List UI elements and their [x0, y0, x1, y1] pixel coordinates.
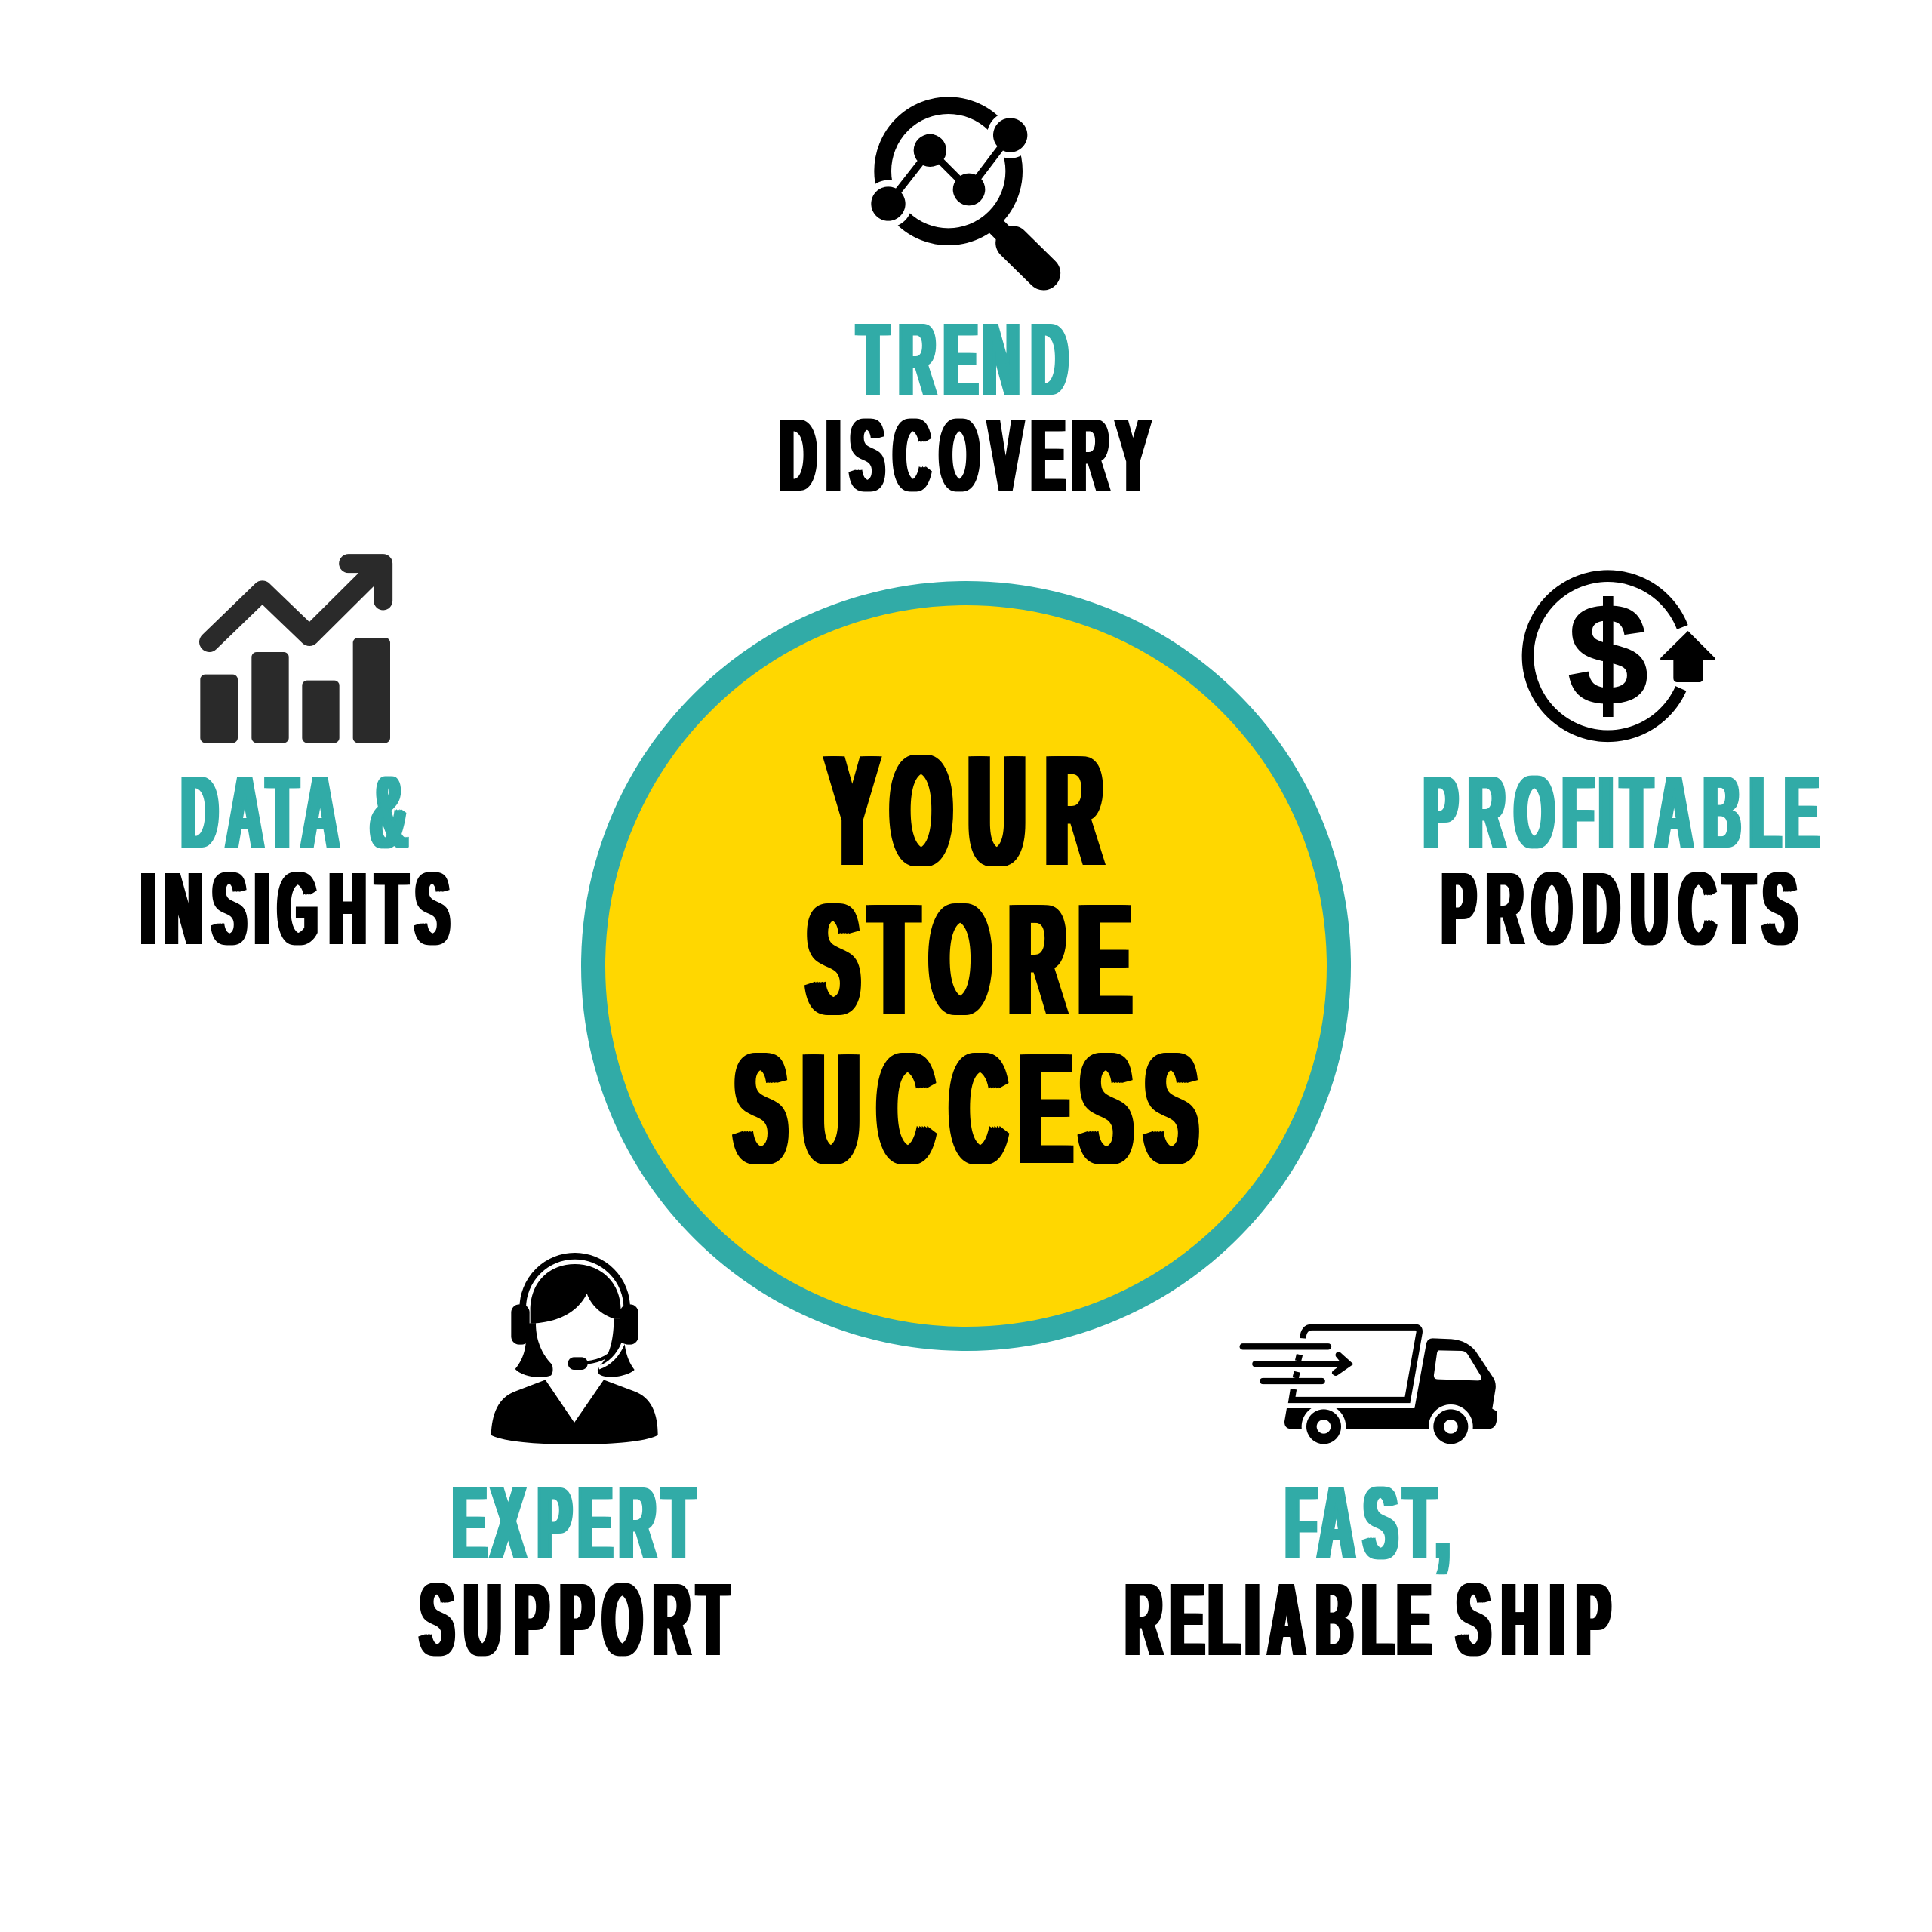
- icon: delivery truck: [1243, 1327, 1497, 1449]
- icon: support agent with headset: [491, 1256, 658, 1444]
- heading: reliable ship: RELIABLE SHIP: [1125, 1562, 1610, 1677]
- heading: fast,: FAST,: [1285, 1466, 1450, 1580]
- yellow disc with teal ring: [593, 593, 1339, 1339]
- central title: SUCCESS: [735, 1020, 1197, 1196]
- icon: magnifier with trend line: [865, 106, 1044, 273]
- central title: YOUR: [826, 722, 1102, 898]
- central title: [735, 722, 1197, 1196]
- section: expert support: [420, 1256, 728, 1677]
- icon: bar chart with rising arrow: [200, 564, 390, 743]
- icon: dollar with up arrow: $: [1567, 573, 1648, 735]
- heading: profitable: PROFITABLE: [1424, 755, 1819, 869]
- heading: insights: INSIGHTS: [141, 851, 449, 966]
- section: trend discovery: [780, 106, 1150, 512]
- heading: products: PRODUCTS: [1442, 851, 1797, 966]
- central title: STORE: [808, 871, 1131, 1047]
- section: fast reliable shipping: [1125, 1327, 1610, 1677]
- heading: expert: EXPERT: [453, 1466, 694, 1580]
- section: profitable products: [1424, 573, 1819, 966]
- central circle: your store success: [593, 593, 1339, 1339]
- heading: support: SUPPORT: [420, 1562, 728, 1677]
- heading: trend: TREND: [857, 302, 1068, 417]
- icon: dollar with up arrow: [1527, 573, 1715, 736]
- heading: discovery: DISCOVERY: [780, 398, 1150, 512]
- heading: data &: DATA &: [181, 755, 407, 869]
- section: data and insights: [141, 564, 449, 966]
